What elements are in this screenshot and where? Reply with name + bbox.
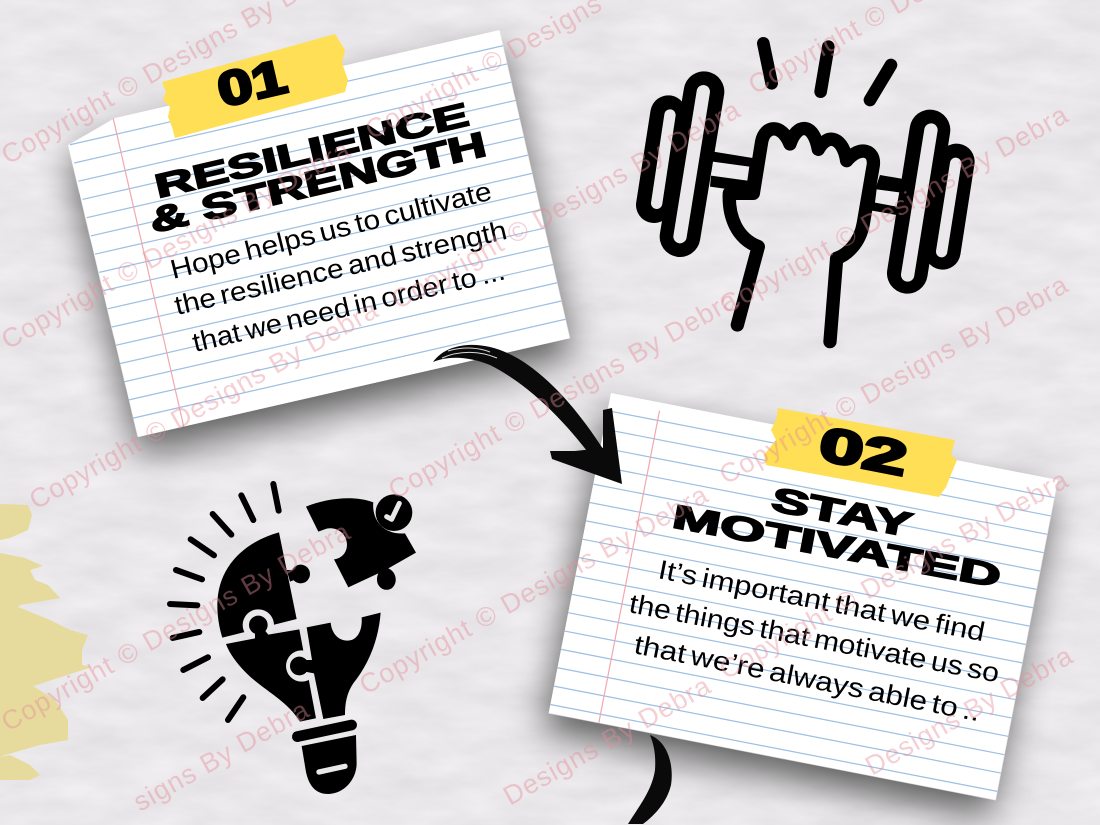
check badge: [376, 494, 412, 531]
copyright watermarks: Copyright © Designs By Debra: [386, 94, 746, 315]
card 01 body text: Hope helps us to cultivate: [167, 176, 495, 285]
card 02 body text: the things that motivate us so: [627, 588, 1002, 688]
card 02 heading: MOTIVATED: [670, 498, 1004, 595]
icon: fist lifting dumbbell: [654, 43, 957, 342]
bulb rays: [170, 484, 279, 720]
card 01 heading: RESILIENCE: [151, 95, 472, 205]
yellow paint brush stroke: [0, 504, 92, 780]
icon: puzzle light bulb: [170, 484, 416, 794]
card 01 body text: the resilience and strength: [172, 215, 510, 321]
dumbbell bar right: [868, 175, 903, 215]
copyright watermarks: Designs By Debra: [498, 670, 716, 811]
copyright watermarks: Copyright © Designs By Debra: [24, 294, 384, 515]
panel: card 01 resilience and strength: [64, 30, 570, 438]
copyright watermarks: Copyright © Designs By Debra: [714, 464, 1074, 685]
card 02 body text: that we’re always able to ..: [632, 629, 983, 727]
copyright watermarks: Copyright © Designs By Debra: [0, 516, 356, 737]
puzzle piece detached upper right: [306, 498, 416, 590]
card 02 yellow tape: [764, 408, 957, 497]
copyright watermarks: Copyright © Designs By Debra: [354, 479, 714, 700]
card 01 body text: that we need in order to ...: [190, 256, 508, 358]
dumbbell bar left: [710, 152, 758, 193]
card 02 body text: It’s important that we find: [656, 554, 987, 647]
copyright watermarks: Copyright © Designs By Debra: [714, 269, 1074, 490]
card 01 body text: [167, 176, 510, 358]
puzzle piece upper left: [217, 532, 310, 641]
card 01 heading: [146, 95, 490, 241]
puzzle piece lower right: [290, 613, 381, 719]
puzzle piece lower left: [226, 616, 317, 722]
card 01 number: 01: [213, 51, 292, 118]
bulb base: [297, 725, 357, 794]
arrow: brush arrow from card 01 to card 02: [433, 345, 622, 484]
card 01 lined paper: [64, 30, 570, 438]
card 02 number: 02: [815, 418, 911, 487]
card 02 heading: [670, 481, 1004, 595]
copyright watermarks: Copyright © Designs By Debra: [714, 99, 1074, 320]
card 02 lined paper: [549, 393, 1058, 800]
dumbbell sparks: [763, 43, 891, 100]
copyright watermarks: Copyright © Designs By Debra: [383, 284, 743, 505]
copyright watermarks: Copyright © Designs By Debra: [0, 134, 356, 355]
left dumbbell plates: [654, 92, 704, 237]
copyright watermarks: Designs By Debra: [860, 640, 1078, 781]
card 02 heading: STAY: [768, 481, 916, 545]
arrow: brush stroke leaving card 02: [628, 735, 672, 824]
card 02 body text: [627, 554, 1002, 727]
hand outline: [729, 129, 873, 342]
panel: card 02 stay motivated: [549, 393, 1058, 800]
card 01 heading: & STRENGTH: [146, 125, 490, 241]
card 01 yellow tape: [162, 34, 348, 138]
copyright watermarks: signs By Debra: [128, 694, 314, 817]
right dumbbell plates: [907, 130, 957, 275]
